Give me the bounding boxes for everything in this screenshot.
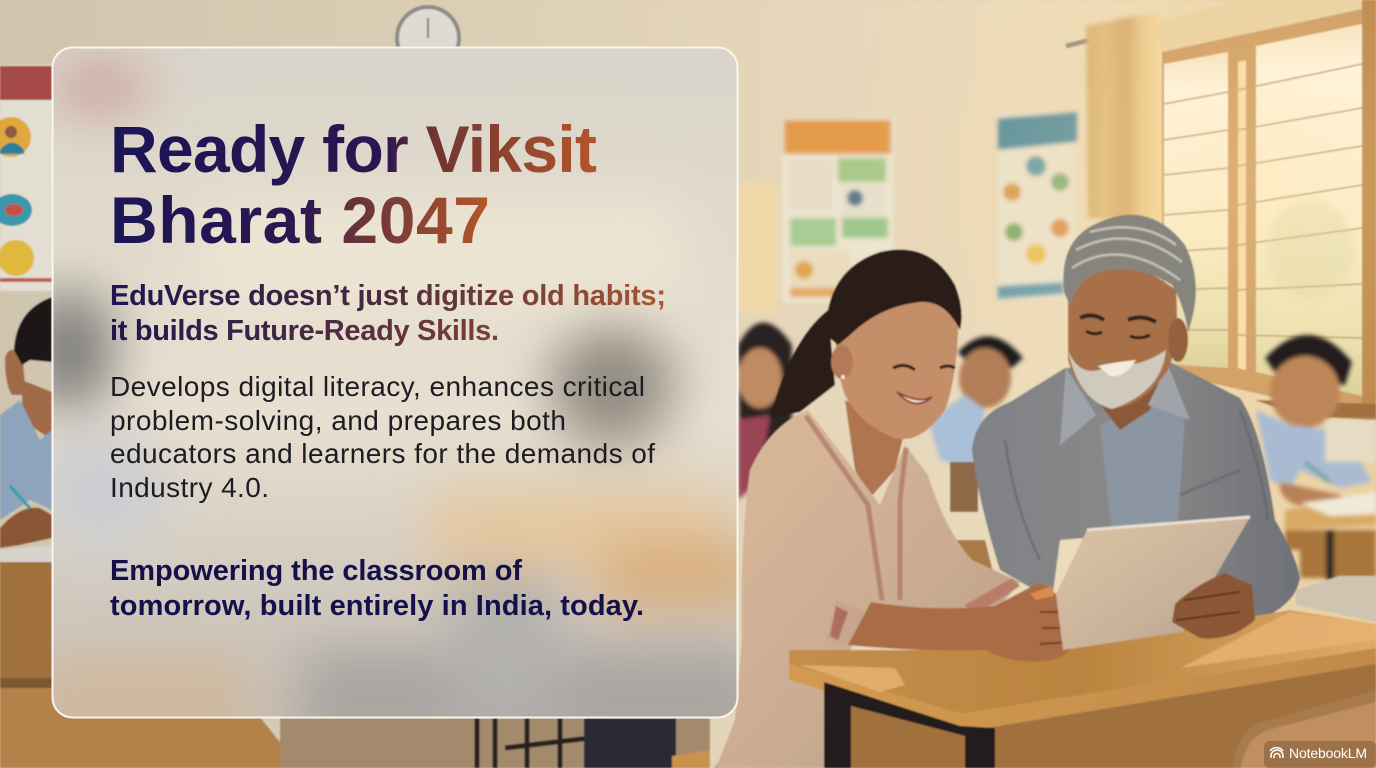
girl forearm and hand bbox=[848, 582, 1081, 662]
shirt placket bbox=[1100, 395, 1185, 532]
girl bbox=[715, 249, 1020, 768]
floor and chair legs bbox=[280, 718, 710, 768]
blurred backdrop bbox=[54, 48, 736, 716]
curtain rod bbox=[1066, 40, 1090, 46]
frosted glass panel bbox=[52, 46, 738, 718]
closing statement: Empowering the classroom of bbox=[110, 555, 522, 587]
background students bbox=[738, 322, 1372, 506]
ponytail bbox=[770, 310, 835, 418]
right back desk bbox=[1285, 420, 1376, 580]
subheading: it builds Future-Ready Skills. bbox=[110, 315, 499, 347]
watermark label: NotebookLM bbox=[1289, 745, 1367, 761]
sleeve cuffs bbox=[826, 600, 866, 647]
body text: educators and learners for the demands of bbox=[110, 438, 655, 469]
sunlight patch on wall bbox=[740, 182, 776, 312]
NotebookLM watermark bbox=[1264, 741, 1376, 768]
teacher eyes and brows bbox=[1080, 315, 1156, 322]
subheading: EduVerse doesn’t just digitize old habits; bbox=[110, 280, 666, 312]
window bbox=[1162, 0, 1376, 420]
body text: problem-solving, and prepares both bbox=[110, 405, 566, 436]
teacher beard bbox=[1068, 350, 1166, 409]
right book on desk bbox=[1296, 576, 1376, 622]
girl neck bbox=[845, 400, 905, 498]
wall clock bbox=[395, 5, 461, 71]
teacher hair bbox=[1063, 215, 1196, 332]
back row girl bbox=[738, 322, 792, 500]
title: Ready for Viksit bbox=[110, 112, 597, 186]
left boy bbox=[0, 297, 52, 548]
closing statement bbox=[110, 555, 644, 622]
girl hair bbox=[826, 249, 962, 345]
teacher hand bbox=[1172, 573, 1255, 639]
tablet bbox=[1056, 517, 1250, 650]
closing statement: tomorrow, built entirely in India, today. bbox=[110, 590, 644, 622]
body text: Develops digital literacy, enhances critical bbox=[110, 371, 645, 402]
seat gap behind arms bbox=[925, 540, 1000, 600]
subheading bbox=[110, 280, 666, 347]
left desks bbox=[0, 545, 280, 768]
desk sun patch bbox=[800, 612, 1376, 692]
teacher bbox=[972, 215, 1300, 620]
neck bbox=[1085, 360, 1165, 430]
girl face bbox=[835, 286, 958, 439]
centre wall poster bbox=[782, 118, 894, 302]
curtain bbox=[1086, 14, 1166, 222]
teacher shirt bbox=[972, 362, 1300, 620]
window glow bbox=[840, 0, 1376, 560]
kurta bbox=[716, 410, 1020, 768]
dark trousers bbox=[715, 720, 760, 768]
window head beam bbox=[1150, 0, 1376, 52]
teacher face bbox=[1068, 265, 1177, 408]
body text bbox=[110, 371, 655, 503]
shirt folds bbox=[1005, 410, 1268, 560]
desk frame bbox=[824, 682, 995, 768]
wooden chair back bbox=[1233, 690, 1376, 768]
collar bbox=[1060, 365, 1190, 445]
girl eyes and smile bbox=[893, 365, 955, 370]
right boy bbox=[1256, 335, 1372, 506]
right wall poster bbox=[998, 112, 1077, 300]
back row boy bbox=[928, 336, 1023, 470]
left wall poster bbox=[0, 65, 52, 291]
icon: notebook arcs bbox=[1270, 748, 1283, 758]
title bbox=[110, 112, 597, 257]
panel glass outline bbox=[52, 48, 738, 718]
body text: Industry 4.0. bbox=[110, 472, 269, 503]
title: Bharat 2047 bbox=[110, 183, 490, 257]
kurta embroidery bbox=[806, 416, 906, 600]
desk front panel bbox=[850, 664, 1376, 768]
main desk bbox=[789, 610, 1376, 768]
